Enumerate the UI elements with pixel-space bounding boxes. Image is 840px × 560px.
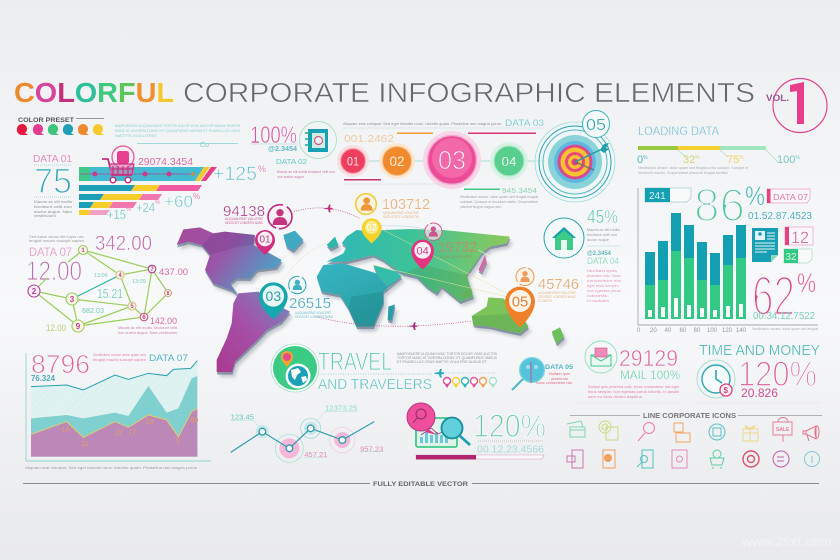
panel: home data 04: auctor augue	[587, 238, 609, 242]
panel: network graph: DATA 07	[29, 245, 72, 259]
map number 45746	[538, 276, 579, 303]
panel: travel and travelers: ET PHASELLUS CRAS MATTIS VOLUTPAT AUGUE ET	[397, 360, 488, 364]
label box 241	[645, 188, 691, 202]
panel: data 01 bars: +15	[107, 207, 126, 222]
panel: loading data: LOADING DATA	[638, 124, 719, 138]
panel: mail: sem eu risus dictum dapibus.	[588, 395, 643, 399]
volume badge: VOL.	[766, 93, 789, 103]
stat 62 percent: 00.34.12.7522	[753, 311, 815, 322]
network nodes: 5	[130, 304, 134, 310]
icon: clock: $	[724, 386, 728, 395]
network edges	[34, 250, 168, 326]
area chart: 8796	[31, 349, 90, 379]
stat 86 percent: %	[745, 181, 765, 211]
network nodes: 1	[81, 248, 85, 254]
icon: credit cards	[567, 421, 585, 437]
panel: data 01 bars: %	[258, 164, 266, 174]
map number 26515: ALIQUAM ERAT VOLUTPAT	[295, 311, 332, 315]
icon: hand circle	[743, 451, 759, 467]
watermark: www.25xt.com	[741, 534, 832, 549]
panel: home data 04: consectetur nisi	[587, 279, 621, 283]
area chart: Aliquam erat volutpat. Sed eget lobortis nunc. lobortis quam. Phasellus nec magna purus	[25, 466, 197, 470]
step 01	[337, 145, 369, 177]
panel: data 01 bars: vestibulum	[34, 214, 56, 218]
area chart: 14	[62, 427, 70, 434]
network nodes	[28, 246, 172, 332]
panel: home data 04: non egestas purus	[587, 289, 621, 293]
panel: data 01 bars: %	[126, 207, 132, 213]
panel: network graph: non auctor augue. Nam vestibulum	[118, 331, 177, 335]
icon: magnifier	[638, 422, 654, 441]
map number 94138: ALIQUAM ERAT VOLUTPAT	[225, 217, 264, 221]
bar chart: 80	[694, 328, 701, 334]
stat 86 percent: 01.52.87.4523	[748, 211, 812, 222]
icon: phone hand	[603, 450, 615, 468]
volume badge	[766, 78, 827, 132]
user ring 94138	[268, 205, 292, 229]
area chart: 9	[176, 437, 180, 444]
mini pins	[444, 378, 496, 388]
panel: 100% contact: DATA 02	[276, 157, 307, 166]
panel: data 05 magnifier: pharetra odio	[551, 377, 568, 381]
panel: loading data: hendrerit mauris. Suspendisse placerat feugiat facilisis	[638, 171, 728, 175]
stat 62 percent: %	[797, 268, 816, 298]
icon: target	[535, 110, 615, 202]
map number 45746: 45746	[538, 276, 579, 293]
panel: data 01 bars: %	[193, 192, 200, 201]
tag 12: 12	[791, 228, 809, 247]
panel: network graph: 437.00	[159, 267, 188, 277]
pin 04	[411, 240, 434, 269]
intro text block: Co	[200, 142, 209, 149]
map number 94138: SED EGET LOBORTIS NUNC	[225, 221, 263, 225]
panel: loading data: 32	[683, 154, 695, 166]
05 badge: 05	[586, 117, 606, 134]
panel: time and money: 20.826	[741, 386, 778, 400]
bar chart: 20	[650, 328, 657, 334]
panel: home data 04: pharetra odio. Nunc	[587, 274, 621, 278]
area chart: 17	[128, 429, 136, 436]
icon: sale sign	[773, 418, 792, 442]
pin 04: 04	[417, 245, 429, 257]
panel: timeline steps: DATA 03	[505, 118, 544, 128]
map number 94138: 94138	[223, 203, 265, 220]
continents	[177, 227, 564, 372]
step 04	[490, 142, 528, 180]
label box 241: 241	[649, 191, 666, 202]
panel: home data 04: 45%	[587, 207, 618, 227]
pin 05	[505, 287, 535, 327]
line chart: 12373.25	[325, 404, 357, 413]
icon: globe badge	[271, 344, 319, 392]
panel: loading data: 75	[727, 154, 739, 166]
panel: network graph: 15.21	[97, 286, 123, 301]
bar chart: Vestibulum ornare, dolor quam sed feugiat	[752, 327, 818, 331]
world map	[177, 194, 564, 372]
pin 02: 02	[367, 223, 377, 233]
area chart: Vestibulum ornare dolor quam sed	[93, 353, 146, 357]
panel: home data 04: eget risus semper,	[587, 284, 619, 288]
panel: home data 04: In sodales	[587, 299, 609, 303]
continent facets	[202, 232, 528, 333]
area chart	[25, 349, 211, 470]
icon: notebook	[305, 129, 328, 152]
area chart: DATA 07	[149, 353, 188, 364]
area chart: 11	[82, 441, 89, 448]
map number 103712: 103712	[382, 196, 430, 213]
flight routes	[283, 208, 513, 326]
stat 86 percent	[694, 179, 812, 231]
user ring 45746	[516, 268, 534, 286]
panel: time and money: 120%	[738, 355, 817, 394]
title: COLORFUL	[14, 77, 174, 108]
panel: 100% contact: Mauris ac elit mollis tincidunt velit non	[277, 170, 335, 174]
panel: data 01 bars: %	[155, 200, 161, 206]
panel: data 05 magnifier	[512, 358, 573, 390]
panel: data 01 bars: DATA 01	[33, 153, 72, 165]
icon: circle device	[709, 424, 725, 440]
panel: network graph: Mauris ac elit mollis, tincidunt velit	[118, 326, 177, 330]
panel: home data 04: @2.3454	[587, 250, 611, 257]
area chart: 80	[191, 418, 199, 425]
panel: 100% contact	[250, 122, 336, 179]
panel: data 05 magnifier: Nunc consectetur nisi	[536, 381, 572, 385]
panel: timeline steps: 945.3454	[502, 186, 537, 195]
pin 01	[255, 230, 275, 255]
panel: network graph: feugiat mauris suscipit sapien	[29, 239, 84, 243]
panel: mail: MAIL 100%	[620, 368, 680, 382]
panel: mail: Nullam quis pharetra odio. Nunc consectetur nisi eget	[588, 385, 679, 389]
panel: time and money	[697, 342, 820, 403]
panel: home data 04: Mauris ac elit mollis	[587, 228, 620, 232]
network nodes: 4	[118, 273, 122, 279]
icon: cart	[710, 450, 724, 468]
panel: loading data: %	[739, 155, 744, 161]
panel: data 05 magnifier: Nullam quis	[549, 372, 570, 376]
network nodes: 2	[32, 287, 37, 296]
panel: home data 04: tincidunt velit non	[587, 233, 617, 237]
step 04: 04	[502, 154, 516, 169]
tag data 07	[767, 189, 810, 203]
intro text block: NUNC AT VIVERRA DONEC ET QUAMPURUS VARIUS ET PHASELLUS CRAS	[115, 129, 241, 133]
panel: travel and travelers: AND TRAVELERS	[318, 376, 432, 393]
network nodes: 6	[142, 315, 146, 321]
pin 03: 03	[266, 288, 281, 304]
panel: 100% contact: 100%	[250, 122, 297, 149]
panel: travel and travelers	[271, 344, 498, 393]
icon: coins	[599, 421, 618, 440]
panel: data 01 bars: Mauris ac elit mollis	[34, 200, 72, 204]
airplane: top	[323, 205, 333, 212]
panel: timeline steps	[337, 118, 545, 209]
panel: search progress: 120%	[473, 408, 546, 444]
icon: screen with magnifier	[407, 403, 470, 447]
panel: timeline steps: 001.2462	[344, 133, 394, 145]
tag data 07: DATA 07	[773, 192, 808, 202]
panel: line corporate icons	[567, 413, 822, 468]
icon: parcels	[674, 423, 690, 442]
panel: loading data	[637, 124, 800, 175]
user ring 103712	[356, 194, 376, 214]
panel: 100% contact: non auctor augue.	[277, 175, 305, 179]
line chart	[231, 404, 383, 462]
user ring 26515	[289, 276, 306, 294]
bar chart: 60	[680, 328, 687, 334]
panel: timeline steps: Vestibulum ornare, dolor quam sed feugiat feugiat	[460, 195, 538, 199]
panel: timeline steps: placerat feugiat magna nam.	[460, 205, 502, 209]
tag 32	[784, 249, 812, 263]
network nodes: 8	[167, 291, 170, 297]
bar chart: 40	[664, 328, 672, 334]
map number 19732: 19732	[438, 239, 477, 256]
panel: time and money: TIME AND MONEY	[699, 342, 820, 359]
area chart: feugiat mauris suscipit sapien	[93, 358, 146, 362]
color preset	[17, 117, 104, 135]
stat 62 percent: 62	[752, 264, 795, 327]
map number 103712: SED EGET LOBORTIS	[383, 215, 420, 219]
panel: data 01 bars: 75	[34, 162, 72, 201]
panel: line corporate icons: LINE CORPORATE ICONS	[643, 413, 736, 420]
panel: loading data: %	[795, 155, 800, 161]
line chart: 957.23	[360, 444, 383, 453]
line chart: 123.45	[231, 413, 254, 422]
intro text block: NAMPOSUERE ALIQUAM NUNC TORTOR DOLOR VITAE AUCTOR MAGNA TEMPOR	[115, 124, 240, 128]
intro text block	[115, 124, 241, 149]
panel: mail: 29129	[619, 345, 678, 371]
map number 26515: 26515	[289, 295, 331, 312]
panel: home data 04: DATA 04	[587, 256, 619, 267]
step 03	[423, 131, 481, 189]
panel: network graph: 12.00	[46, 323, 66, 333]
icon: megaphone	[803, 426, 819, 441]
icon: gift	[743, 426, 758, 441]
panel: network graph: Sed fusce varius elit turpis nec	[29, 235, 84, 239]
panel: travel and travelers: NAMPOSUERE ALIQUAM NUNC TORTOR DOLOR VITAE AUCTOR	[397, 352, 497, 356]
icon: tablet	[672, 450, 687, 468]
panel: search progress: 00.12.23.4566	[477, 444, 544, 456]
panel: timeline steps: Aliquam erat volutpat. Sed eget lobortis nunc. Ubortis quam. Phasellus nec magna purus	[343, 122, 501, 126]
panel: loading data: 100	[777, 154, 795, 166]
pin 01: 01	[259, 235, 271, 246]
icon: phone search	[637, 450, 653, 468]
panel: mail: risus semper, non egestas purus lobortis. In iaculis	[588, 390, 679, 394]
map number 26515: SED EGET LOBORTIS NUNC	[295, 315, 333, 319]
stat 86 percent: 86	[694, 179, 745, 231]
icon: thumbs circle	[773, 451, 789, 467]
title: CORPORATE INFOGRAPHIC ELEMENTS	[183, 77, 755, 108]
step 01: 01	[347, 154, 359, 168]
bar chart: 100	[707, 328, 718, 334]
airplane: bottom	[408, 322, 418, 330]
panel: network graph: 682.03	[82, 308, 104, 315]
panel: network graph: 12.00	[26, 256, 82, 286]
panel: loading data: Vestibulum ornare, dolor quam sed feugiat a leo suscipit. Suscipit in	[638, 166, 748, 170]
intro text block: MATTIS VOLUTPAT	[115, 134, 158, 138]
panel: home data 04	[544, 207, 621, 303]
tag 32: 32	[786, 252, 797, 263]
step 02: 02	[390, 153, 405, 169]
panel: mail	[575, 341, 680, 403]
network nodes: 7	[150, 267, 154, 273]
step 03: 03	[438, 145, 466, 175]
bar chart: 0	[637, 328, 641, 334]
panel: data 01 bars: +60	[164, 192, 193, 211]
bar chart	[637, 188, 818, 334]
panel: loading data: %	[695, 155, 700, 161]
panel: data 01 bars: 29074.3454	[138, 156, 193, 168]
panel: network graph: 13:06	[94, 273, 108, 279]
map number 45746: ALIQUAM ERAT VOLUTPAT	[538, 291, 577, 295]
bar chart: 120	[722, 328, 733, 334]
panel: data 01 bars	[33, 146, 266, 222]
color preset: COLOR PRESET	[18, 117, 74, 124]
panel: travel and travelers: TORTOR NUNC AT VIVERRA DONEC ET QUAMPURUS VARIUS	[397, 356, 498, 360]
icon: shopping cart	[102, 146, 134, 183]
panel: travel and travelers: TRAVEL	[318, 348, 392, 376]
map number 19732: ALIQUAM ERAT VOLUTPAT	[440, 255, 473, 259]
map number 45746: ET LOBORTIS	[538, 299, 552, 303]
map number 103712: ALIQUAM ERAT VOLUTPAT	[383, 211, 420, 215]
panel: search progress	[407, 403, 546, 460]
panel: timeline steps: volutpat. Quisque ut tincidunt mattis. Suspendisse	[460, 200, 538, 204]
stacked bars	[79, 167, 217, 215]
user ring 19732	[425, 223, 442, 240]
area chart: 26	[146, 418, 154, 425]
network nodes: 3	[70, 295, 75, 304]
panel: 100% contact: @2.3454	[268, 146, 297, 153]
line chart: 457.21	[304, 450, 327, 459]
map number 26515	[289, 295, 333, 319]
pin 03	[259, 282, 288, 319]
panel: network graph: 13:09	[132, 279, 146, 285]
panel: data 05 magnifier: DATA 05	[545, 364, 573, 371]
panel: network graph: 142.00	[150, 316, 177, 326]
panel: network graph: 342.00	[95, 232, 152, 255]
area chart: 22	[115, 429, 123, 436]
panel: data 01 bars: auctor augue. Nam	[34, 210, 72, 214]
footer label: FULLY EDITABLE VECTOR	[373, 481, 468, 488]
panel: home data 04: Nullam quis	[587, 269, 617, 273]
pin 02	[362, 218, 382, 243]
icon: document	[752, 228, 778, 262]
panel: data 01 bars: +125	[213, 164, 257, 185]
icon: sale sign: SALE	[776, 427, 790, 433]
pin 05: 05	[512, 294, 528, 310]
icon: info circle	[804, 452, 820, 466]
panel: network graph	[26, 232, 188, 335]
area chart: 76.324	[31, 374, 56, 383]
tag 12	[785, 227, 813, 247]
network nodes: 9	[76, 322, 81, 331]
map number 45746: SED EGET LOBORTIS NUNC	[538, 295, 576, 299]
step 02	[379, 143, 415, 179]
bar chart: 140	[736, 328, 747, 334]
panel: data 01 bars: +24	[136, 200, 155, 215]
panel: home data 04: lobortis.	[587, 294, 609, 298]
panel: loading data: %	[643, 155, 648, 161]
panel: data 01 bars: tincidunt velit non	[34, 205, 72, 209]
panel: loading data: 0	[637, 154, 643, 166]
icon: phone cart	[567, 450, 583, 468]
